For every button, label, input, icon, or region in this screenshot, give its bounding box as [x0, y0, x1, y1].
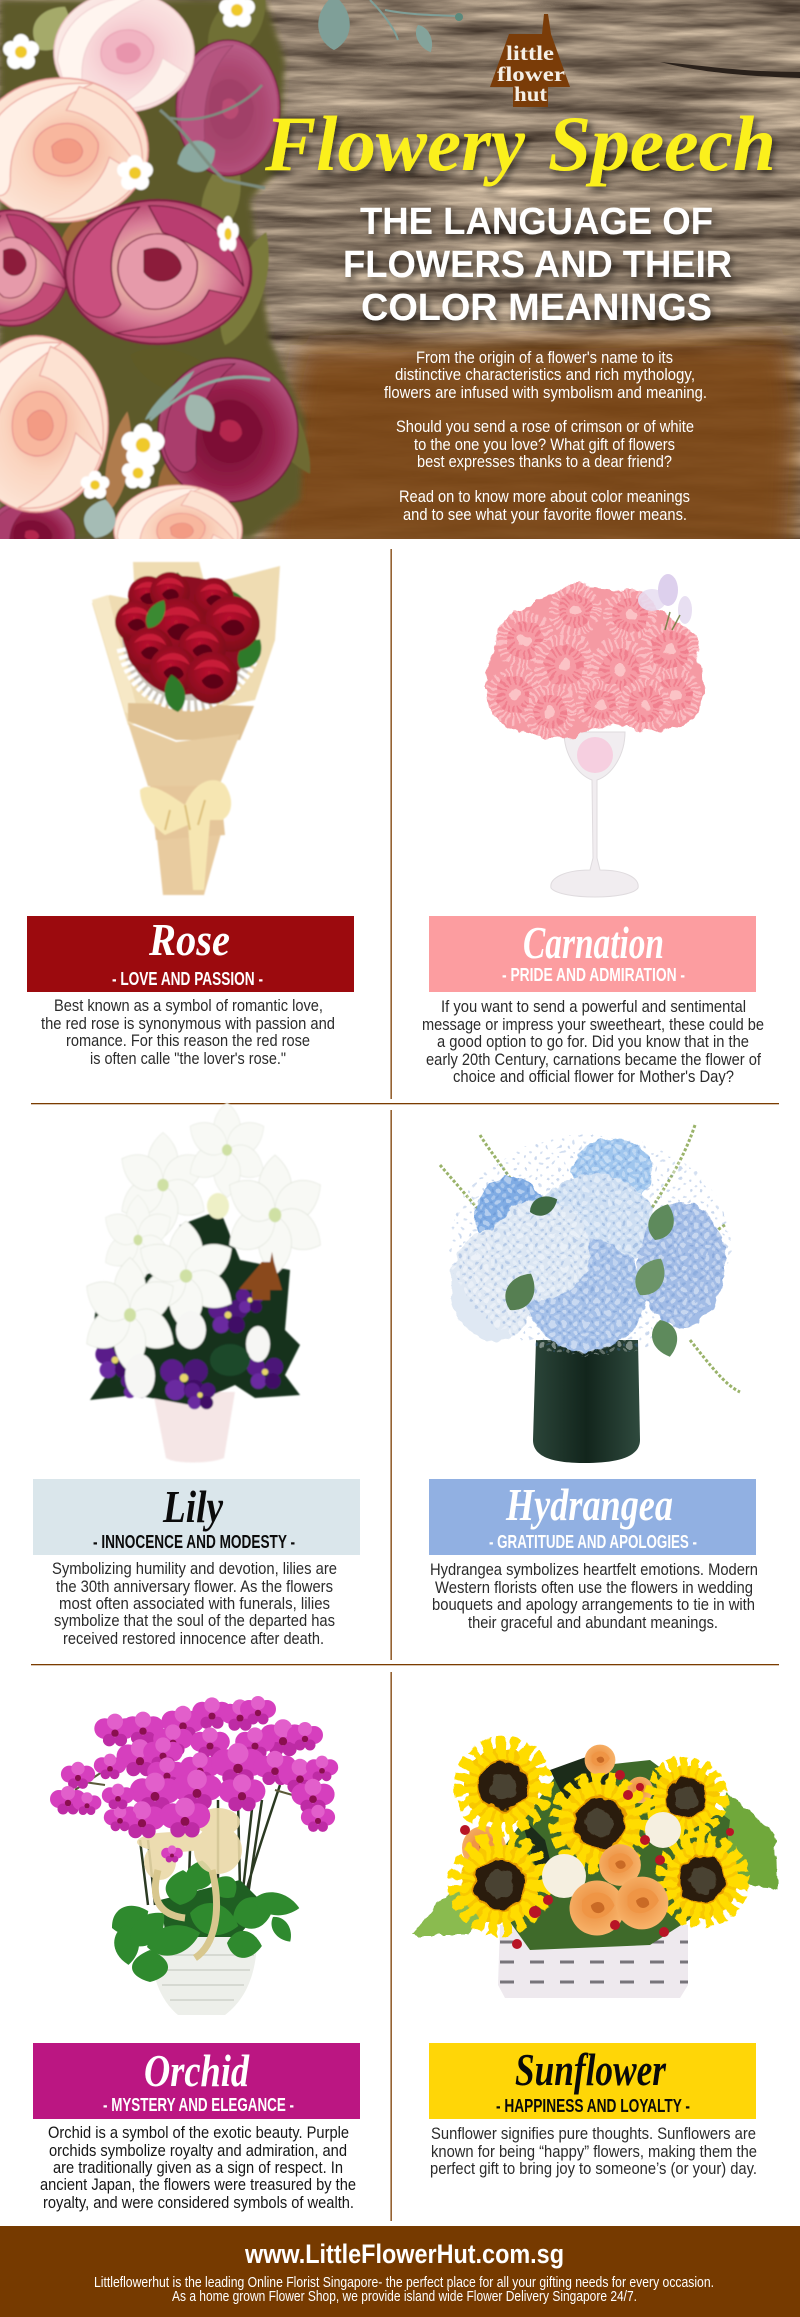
orchid description: are traditionally given as a sign of respect. In: [53, 2159, 343, 2177]
carnation banner: [429, 916, 756, 992]
orchid description: royalty, and were considered symbols of wealth.: [43, 2194, 354, 2212]
sunflower banner: - HAPPINESS AND LOYALTY -: [496, 2096, 690, 2116]
sunflower description: perfect gift to bring joy to someone’s (or your) day.: [430, 2160, 757, 2178]
lily description: symbolize that the soul of the departed has: [54, 1612, 335, 1630]
hydrangea illustration: [440, 1125, 740, 1463]
carnation description: If you want to send a powerful and sentimental: [441, 998, 746, 1016]
rose bouquet illustration: [92, 562, 280, 895]
title script: Flowery: [264, 100, 525, 187]
sunflower banner: Sunflower: [515, 2044, 667, 2095]
logo: hut: [514, 82, 547, 106]
footer: [0, 2226, 800, 2317]
title script: [264, 100, 776, 187]
orchid description: Orchid is a symbol of the exotic beauty. Purple: [48, 2124, 349, 2142]
hydrangea banner: [429, 1479, 756, 1555]
hanging teal leaves: [318, 0, 463, 55]
orchid illustration: [50, 1696, 338, 2015]
sunflower illustration: [412, 1745, 778, 1998]
hydrangea banner: - GRATITUDE AND APOLOGIES -: [489, 1532, 697, 1552]
rose description: [41, 997, 335, 1068]
intro text: best expresses thanks to a dear friend?: [417, 452, 672, 471]
intro text: From the origin of a flower's name to its: [416, 348, 673, 367]
carnation description: message or impress your sweetheart, these could be: [422, 1016, 764, 1034]
logo: little: [506, 41, 554, 65]
carnation description: early 20th Century, carnations became the flower of: [426, 1051, 761, 1069]
intro text: [384, 348, 707, 524]
subtitle: FLOWERS AND THEIR: [343, 244, 732, 286]
lily banner: [33, 1479, 360, 1555]
floral border: [0, 0, 310, 539]
peach rose: [0, 78, 148, 222]
back pink rose: [176, 40, 280, 176]
hydrangea description: bouquets and apology arrangements to tie in with: [432, 1596, 755, 1614]
rose banner: - LOVE AND PASSION -: [112, 969, 263, 989]
rose description: is often calle "the lover's rose.": [90, 1050, 286, 1068]
rose banner: Rose: [148, 914, 230, 965]
hydrangea description: their graceful and abundant meanings.: [468, 1614, 718, 1632]
orchid banner: Orchid: [144, 2045, 250, 2096]
left magenta rose: [0, 210, 69, 326]
hydrangea description: Hydrangea symbolizes heartfelt emotions. Modern: [430, 1561, 758, 1579]
hydrangea description: [430, 1561, 758, 1632]
orchid description: [40, 2124, 356, 2212]
lily illustration: [79, 1102, 329, 1462]
lily description: most often associated with funerals, lilies: [59, 1595, 330, 1613]
white blossoms: [3, 0, 255, 499]
orchid description: ancient Japan, the flowers were treasured by the: [40, 2176, 356, 2194]
hydrangea description: Western florists often use the flowers in wedding: [435, 1579, 753, 1597]
orchid banner: [33, 2043, 360, 2119]
intro text: Should you send a rose of crimson or of white: [396, 417, 694, 436]
panel: lily: [33, 1102, 360, 1648]
carnation description: [422, 998, 764, 1086]
lower left peach rose: [0, 336, 108, 512]
large pale rose: [54, 0, 194, 112]
panel: rose: [27, 562, 354, 1068]
lily description: Symbolizing humility and devotion, lilies are: [52, 1560, 337, 1578]
sunflower description: [430, 2125, 757, 2178]
footer: www.LittleFlowerHut.com.sg: [244, 2239, 564, 2269]
rose description: romance. For this reason the red rose: [66, 1032, 310, 1050]
carnation description: choice and official flower for Mother's Day?: [453, 1068, 734, 1086]
rose banner: [27, 914, 354, 992]
intro text: to the one you love? What gift of flowers: [414, 435, 675, 454]
logo: [490, 14, 570, 107]
panel: sunflower: [412, 1745, 778, 2178]
logo: flower: [497, 62, 565, 86]
panel: carnation: [422, 574, 764, 1086]
subtitle: COLOR MEANINGS: [361, 287, 712, 329]
sunflower banner: [429, 2043, 756, 2119]
lily description: [52, 1560, 337, 1648]
panel: orchid: [33, 1696, 360, 2212]
orchid description: orchids symbolize royalty and admiration, and: [49, 2142, 347, 2160]
sunflower description: Sunflower signifies pure thoughts. Sunflowers are: [431, 2125, 756, 2143]
footer: As a home grown Flower Shop, we provide island wide Flower Delivery Singapore 24/7.: [172, 2289, 637, 2305]
dark magenta rose: [158, 358, 298, 502]
subtitle: [343, 201, 732, 329]
lily description: received restored innocence after death.: [63, 1630, 324, 1648]
lily description: the 30th anniversary flower. As the flowers: [56, 1578, 333, 1596]
brown panel behind intro text: [260, 335, 800, 560]
lily banner: Lily: [162, 1481, 223, 1532]
carnation description: a good option to go for. Did you know that in the: [437, 1033, 749, 1051]
bottom peach rose: [112, 484, 244, 539]
hydrangea banner: Hydrangea: [505, 1479, 673, 1530]
carnation banner: Carnation: [523, 917, 664, 968]
hero panel: [0, 0, 800, 575]
panel: hydrangea: [429, 1125, 758, 1632]
intro text: flowers are infused with symbolism and meaning.: [384, 383, 707, 402]
carnation illustration: [486, 574, 704, 897]
intro text: and to see what your favorite flower means.: [403, 505, 687, 524]
lily banner: - INNOCENCE AND MODESTY -: [93, 1532, 295, 1552]
rose description: Best known as a symbol of romantic love,: [54, 997, 323, 1015]
subtitle: THE LANGUAGE OF: [360, 201, 713, 243]
rose description: the red rose is synonymous with passion and: [41, 1015, 335, 1033]
bottom dark rose: [0, 505, 76, 539]
orchid banner: - MYSTERY AND ELEGANCE -: [103, 2095, 294, 2115]
title script: Speech: [548, 100, 776, 187]
intro text: Read on to know more about color meanings: [399, 487, 690, 506]
sunflower description: known for being “happy” flowers, making them the: [431, 2143, 757, 2161]
intro text: distinctive characteristics and rich mythology,: [395, 365, 695, 384]
carnation banner: - PRIDE AND ADMIRATION -: [502, 965, 685, 985]
central magenta rose: [65, 200, 251, 344]
